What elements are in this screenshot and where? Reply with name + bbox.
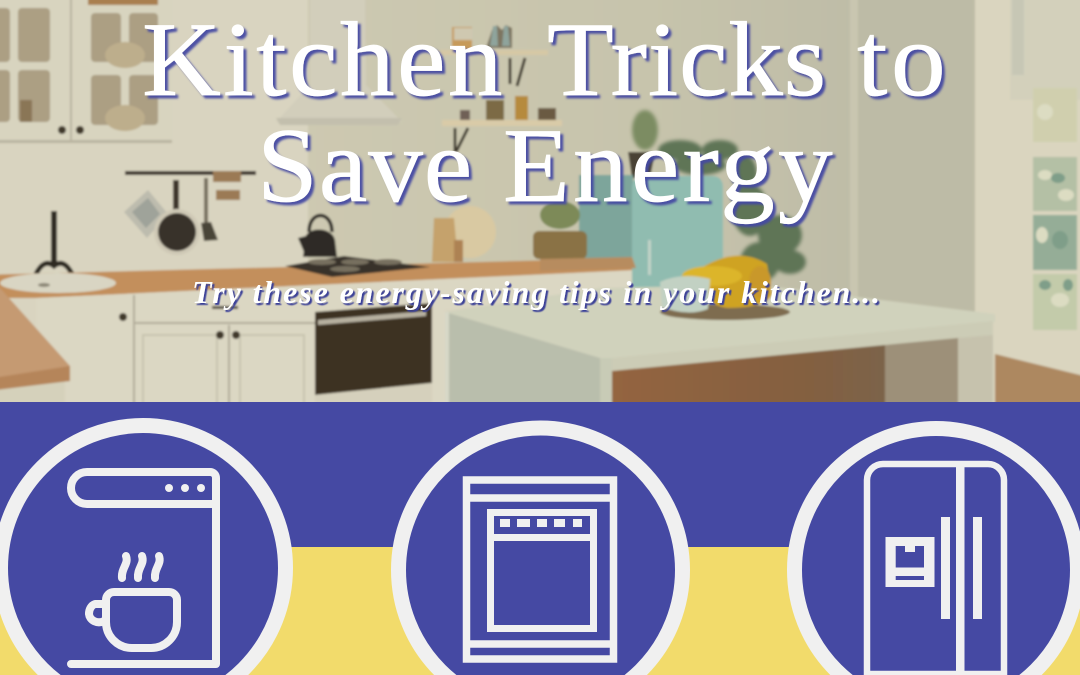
- blue and yellow band: [0, 402, 1080, 675]
- icon: coffee maker: [0, 418, 293, 675]
- background photo: kitchen: [0, 0, 1080, 402]
- title: Kitchen Tricks to Save Energy: Save: [257, 107, 472, 225]
- title: Kitchen Tricks to Save Energy: to: [857, 1, 946, 119]
- icon: oven: [391, 420, 690, 675]
- subtitle: Try these energy-saving tips in your kitchen...: [192, 274, 880, 310]
- title: Kitchen Tricks to Save Energy: [142, 1, 946, 225]
- title: Kitchen Tricks to Save Energy: Kitchen: [142, 1, 502, 119]
- title: Kitchen Tricks to Save Energy: Energy: [503, 107, 833, 225]
- icon: refrigerator: [787, 421, 1080, 675]
- title: Kitchen Tricks to Save Energy: Tricks: [547, 1, 826, 119]
